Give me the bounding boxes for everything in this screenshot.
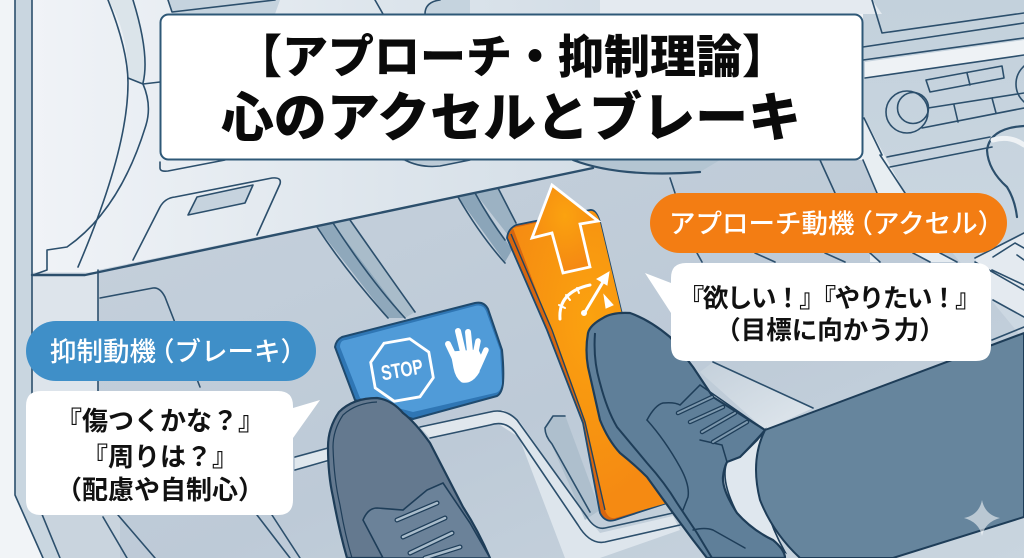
right shoe [586,313,785,558]
icon: stop sign: STOP [379,356,425,385]
icon: sparkle watermark [964,500,1000,536]
icon: up arrow [532,185,598,273]
callout: accelerator thoughts: 『欲しい！』『やりたい！』 [679,285,979,313]
sock [725,430,785,552]
callout: brake thoughts: （配慮や自制心） [56,475,264,505]
brake pedal [335,303,503,419]
shoelaces [647,385,765,548]
callout: brake thoughts [26,391,320,515]
label: brake motive: 抑制動機（ブレーキ） [50,337,307,367]
callout: brake thoughts: 『周りは？』 [82,442,238,472]
icon: speedometer [559,272,613,319]
shoelaces [363,483,490,558]
label: approach motive [650,193,1007,253]
callout: accelerator thoughts [645,263,991,361]
label: brake motive [26,321,316,381]
left shoe [328,398,490,558]
label: approach motive: アプローチ動機（アクセル） [669,209,1004,239]
accelerator pedal [507,185,667,521]
callout: brake thoughts: 『傷つくかな？』 [56,406,264,436]
trouser leg [756,333,1024,558]
title panel [160,14,862,160]
title line 2: 心のアクセルとブレーキ [221,88,801,148]
icon: hand [448,331,486,382]
icon: stop sign [368,336,436,404]
title line 1: 【アプローチ・抑制理論】 [236,31,788,83]
callout: accelerator thoughts: （目標に向かう力） [715,317,945,345]
